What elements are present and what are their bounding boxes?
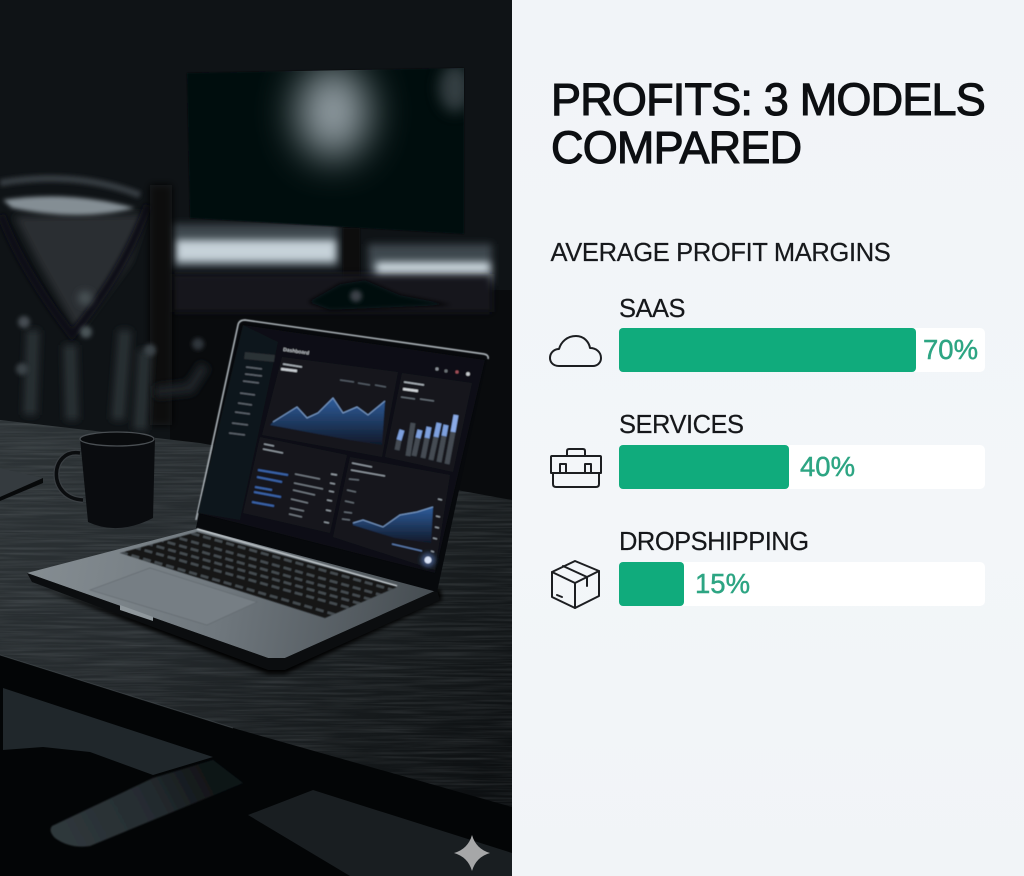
- hinge highlight: [197, 529, 397, 586]
- area chart: [270, 398, 385, 445]
- trackpad: [90, 568, 257, 625]
- dashboard screen: [198, 325, 485, 573]
- laptop shadow: [30, 584, 442, 674]
- laptop: [27, 320, 488, 674]
- title: COMPARED: [551, 122, 801, 172]
- icon: toolbox: [550, 448, 602, 488]
- laptop screen lid: [196, 320, 488, 592]
- notebook on desk: [0, 468, 43, 501]
- title: PROFITS: 3 MODELS: [551, 74, 985, 125]
- panel: profit comparison: [512, 0, 1024, 876]
- label: SaaS: SAAS: [619, 295, 685, 323]
- bar: Dropshipping 15%: 15%: [695, 568, 750, 599]
- coffee mug: [56, 432, 155, 528]
- line area chart: [353, 507, 433, 543]
- dashboard screen: Dashboard: [283, 347, 309, 357]
- subtitle: AVERAGE PROFIT MARGINS: [550, 239, 890, 267]
- label: Services: SERVICES: [619, 411, 744, 439]
- bar: Dropshipping 15%: [619, 562, 985, 606]
- blurred office chair: [0, 179, 205, 430]
- bar: Services 40%: 40%: [800, 451, 855, 482]
- bar: SaaS 70%: [619, 328, 985, 372]
- panel: dark laptop desk photo: [0, 0, 512, 876]
- background wall: [0, 0, 512, 876]
- bar chart: [397, 415, 456, 464]
- keyboard: [120, 530, 400, 618]
- label: Dropshipping: DROPSHIPPING: [619, 528, 809, 556]
- blurred monitor: [172, 64, 492, 312]
- icon: package box: [551, 560, 600, 609]
- sparkle watermark: [454, 835, 490, 871]
- icon: cloud: [549, 335, 602, 367]
- chair armrest: [51, 760, 243, 847]
- bar: SaaS 70%: 70%: [923, 334, 978, 365]
- desk surface: [0, 420, 512, 820]
- bar: Services 40%: [619, 445, 985, 489]
- title: [551, 74, 985, 172]
- laptop base: [27, 528, 437, 658]
- floor and desk underside: [0, 650, 512, 876]
